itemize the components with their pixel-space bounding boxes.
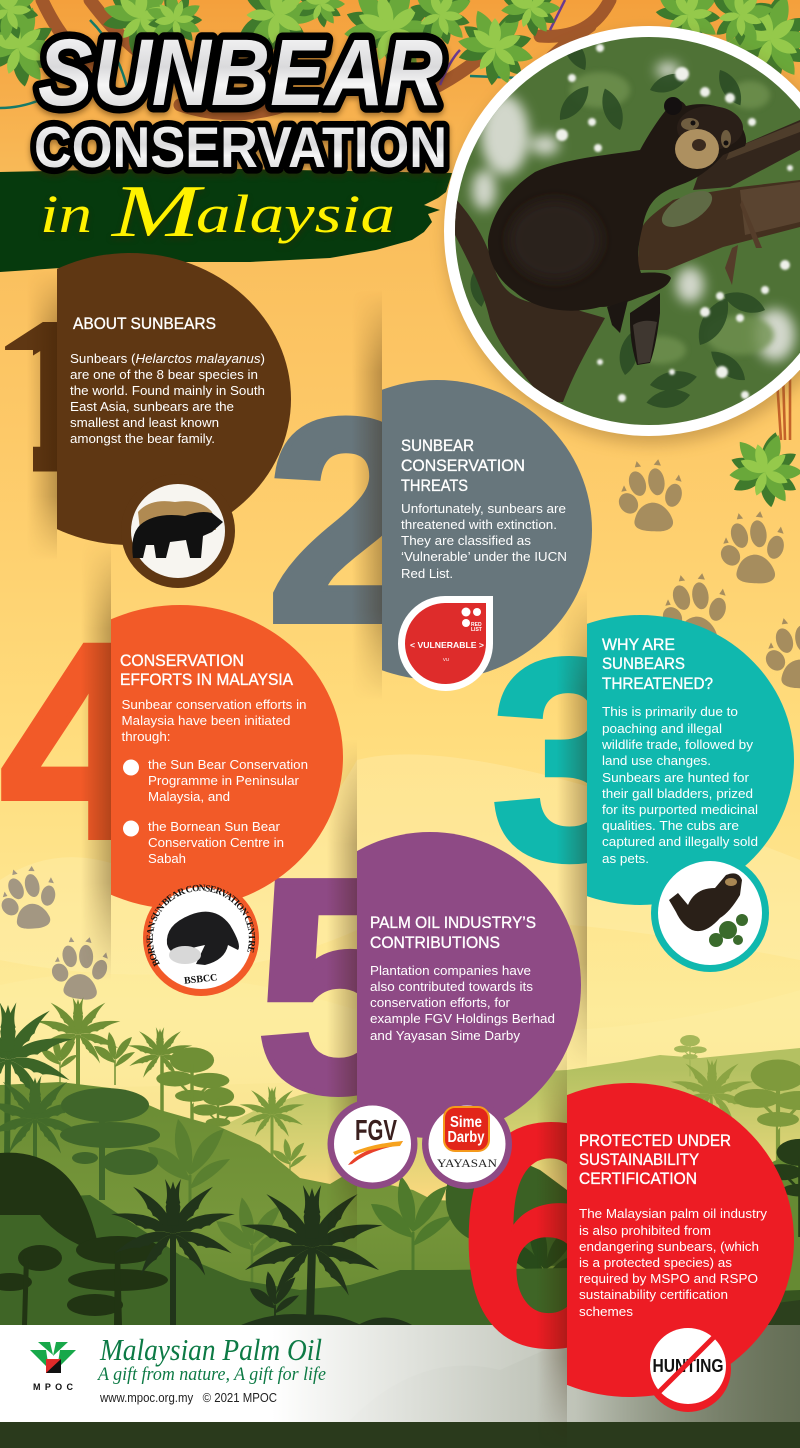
icon: IUCN vulnerable badge: < VULNERABLE > <box>410 640 484 650</box>
umbrella tree <box>60 1088 160 1200</box>
panel 6 body text: sustainability certification <box>579 1287 728 1302</box>
icon: BSBCC badge: BSBCC <box>184 972 218 987</box>
panel 3: why threatened <box>587 615 794 972</box>
panel 4 intro text: through: <box>122 729 170 744</box>
panel 1 body text: the world. Found mainly in South <box>70 383 265 398</box>
panel 5: palm oil industry contributions <box>328 832 581 1189</box>
panel 6 body text <box>579 1206 767 1319</box>
back palms on main hill <box>35 997 121 1066</box>
panel 3 body text <box>601 704 758 866</box>
panel 1: about sunbears: ABOUT SUNBEARS <box>73 315 216 333</box>
panel 3 body text: This is primarily due to <box>602 704 738 719</box>
panel 6: protected under certification: CERTIFICATION <box>579 1170 697 1188</box>
logo: FGV: FGV <box>355 1115 397 1147</box>
panel 2: threats: THREATS <box>401 477 468 495</box>
logo: Sime Darby Yayasan: YAYASAN <box>437 1156 497 1170</box>
panel 5: palm oil industry contributions: CONTRIBUTIONS <box>370 934 500 952</box>
panel 2 body text <box>401 501 567 581</box>
dark mound and tree shapes <box>0 1153 97 1252</box>
main hill <box>0 1082 800 1340</box>
panel 3 body text: qualities. The cubs are <box>602 818 739 833</box>
bullet two: Sabah <box>148 851 186 866</box>
panel 1 body text: are one of the 8 bear species in <box>70 367 258 382</box>
panel 1 body text: amongst the bear family. <box>70 431 215 446</box>
upper branch <box>693 120 800 190</box>
fold shadows left of panels <box>31 278 57 552</box>
numeral 5: 5 <box>255 815 425 1156</box>
panel 1: about sunbears <box>57 253 291 588</box>
title line: in Malaysia: M <box>111 171 206 253</box>
panel 5 body text <box>370 963 555 1043</box>
icon: IUCN vulnerable badge: LIST <box>471 627 482 633</box>
icon: no hunting badge: HUNTING <box>652 1356 724 1376</box>
panel 4: conservation efforts: CONSERVATION <box>120 652 244 670</box>
lower branch <box>637 180 800 270</box>
footer band <box>0 1325 800 1448</box>
panel 1 body text: smallest and least known <box>70 415 219 430</box>
panel 6 body text: is a protected species) as <box>579 1255 732 1270</box>
panel 4: conservation efforts <box>111 605 343 996</box>
bullet one: the Sun Bear Conservation <box>148 757 308 772</box>
panel 3 body text: as pets. <box>602 851 649 866</box>
panel 6: protected under certification: SUSTAINABILITY <box>579 1151 699 1169</box>
left palms <box>0 1001 74 1108</box>
panel 3 body text: poaching and illegal <box>602 721 722 736</box>
panel 6: protected under certification <box>567 1083 794 1412</box>
numeral 3: 3 <box>491 601 650 919</box>
icon: bear cub in tree badge <box>651 854 769 972</box>
bullet two: the Bornean Sun Bear <box>148 819 281 834</box>
logo: Sime Darby Yayasan: Darby <box>448 1129 485 1146</box>
icon: no hunting badge <box>645 1326 731 1412</box>
jungle silhouette background <box>0 997 800 1425</box>
panel 2 body text: Unfortunately, sunbears are <box>401 501 566 516</box>
website and copyright: www.mpoc.org.my © 2021 MPOC <box>99 1391 277 1405</box>
right vines and hanging foliage <box>729 372 800 508</box>
bullet one: Programme in Peninsular <box>148 773 300 788</box>
tree trunk <box>455 198 605 402</box>
dark-green tree right of panel five <box>446 1159 567 1266</box>
panel 4: conservation efforts: EFFORTS IN MALAYSIA <box>120 671 293 689</box>
panel 1 body text <box>70 351 265 446</box>
panel 5 body text: conservation efforts, for <box>370 995 511 1010</box>
numeral 4: 4 <box>0 585 156 896</box>
title <box>34 20 447 253</box>
far hill <box>220 1048 800 1340</box>
panel 6 body text: required by MSPO and RSPO <box>579 1271 758 1286</box>
numeral 6: 6 <box>458 1058 635 1413</box>
panel 3 body text: land use changes. <box>602 753 711 768</box>
panel 6 body text: endangering sunbears, (which <box>579 1239 759 1254</box>
logo: MPOC <box>30 1342 76 1392</box>
logo: FGV <box>328 1099 418 1189</box>
panel 6 body text: schemes <box>579 1304 633 1319</box>
head <box>664 97 682 115</box>
bullet two: Conservation Centre in <box>148 835 284 850</box>
panel 1 body text: East Asia, sunbears are the <box>70 399 234 414</box>
panel 3 body text: wildlife trade, followed by <box>601 737 753 752</box>
panel 5 body text: example FGV Holdings Berhad <box>370 1011 555 1026</box>
panel 3: why threatened: WHY ARE <box>602 636 675 654</box>
logo: Sime Darby Yayasan: Sime <box>450 1114 482 1131</box>
panel 2 body text: Red List. <box>401 566 453 581</box>
title line: in Malaysia: in <box>40 184 92 244</box>
tagline: A gift from nature: A gift from nature, A gift for life <box>96 1364 326 1385</box>
bullet one <box>123 757 308 804</box>
panel 3: why threatened: THREATENED? <box>602 675 713 693</box>
panel 3 body text: captured and illegally sold <box>602 834 758 849</box>
paw prints <box>0 459 800 1002</box>
panel 4 intro text: Malaysia have been initiated <box>122 713 290 728</box>
background light waves <box>0 754 800 1090</box>
title line: SUNBEAR: SUNBEAR <box>38 20 443 125</box>
icon: IUCN vulnerable badge <box>398 596 493 691</box>
panel 1 body text: Sunbears (Helarctos malayanus) <box>70 351 265 366</box>
footer branding <box>30 1332 326 1405</box>
panel 3 body text: their gall bladders, prized <box>602 786 753 801</box>
panel 3: why threatened: SUNBEARS <box>602 655 685 673</box>
top foliage and branches <box>0 0 800 120</box>
hanging leg <box>607 293 660 365</box>
panel 5: palm oil industry contributions: PALM OIL INDUSTRY’S <box>370 914 536 932</box>
icon: BSBCC badge: BORNEAN SUN BEAR CONSERVATION CENTRE <box>146 884 256 967</box>
icon: IUCN vulnerable badge: VU <box>443 657 449 662</box>
panel 4 intro text <box>122 697 306 744</box>
icon: bear silhouette badge <box>121 474 235 588</box>
panel 2 body text: threatened with extinction. <box>401 517 557 532</box>
bullet one: Malaysia, and <box>148 789 230 804</box>
icon: IUCN vulnerable badge: RED <box>471 622 482 628</box>
panel 3 body text: for its purported medicinal <box>602 802 758 817</box>
panel 5 body text: also contributed towards its <box>370 979 533 994</box>
title line: in Malaysia <box>40 171 395 253</box>
panel 2 body text: ‘Vulnerable’ under the IUCN <box>401 549 567 564</box>
panel 2: threats: CONSERVATION <box>401 457 525 475</box>
panel 2: threats: SUNBEAR <box>401 437 474 455</box>
panel 3 body text: Sunbears are hunted for <box>602 770 750 785</box>
logo: Sime Darby Yayasan <box>422 1099 512 1189</box>
panel 4 intro text: Sunbear conservation efforts in <box>122 697 306 712</box>
tagline: Malaysian Palm Oil: Malaysian Palm Oil <box>99 1332 322 1367</box>
panel 6 body text: is also prohibited from <box>579 1223 711 1238</box>
numeral 2: 2 <box>266 359 427 683</box>
panel 2 body text: They are classified as <box>401 533 531 548</box>
bullet two <box>123 819 284 866</box>
title line: in Malaysia: alaysia <box>196 184 395 244</box>
title line: CONSERVATION: CONSERVATION <box>34 116 447 180</box>
photo: sunbear in a tree <box>440 26 800 444</box>
green brush strip behind title <box>0 168 452 272</box>
panel 5 body text: Plantation companies have <box>370 963 531 978</box>
panel 6 body text: The Malaysian palm oil industry <box>579 1206 767 1221</box>
panel 6: protected under certification: PROTECTED UNDER <box>579 1132 731 1150</box>
bear body <box>488 100 746 311</box>
logo: MPOC: MPOC <box>33 1382 74 1392</box>
panel 5 body text: and Yayasan Sime Darby <box>370 1028 520 1043</box>
lower hill <box>0 1195 567 1340</box>
panel 2: threats <box>382 380 592 691</box>
